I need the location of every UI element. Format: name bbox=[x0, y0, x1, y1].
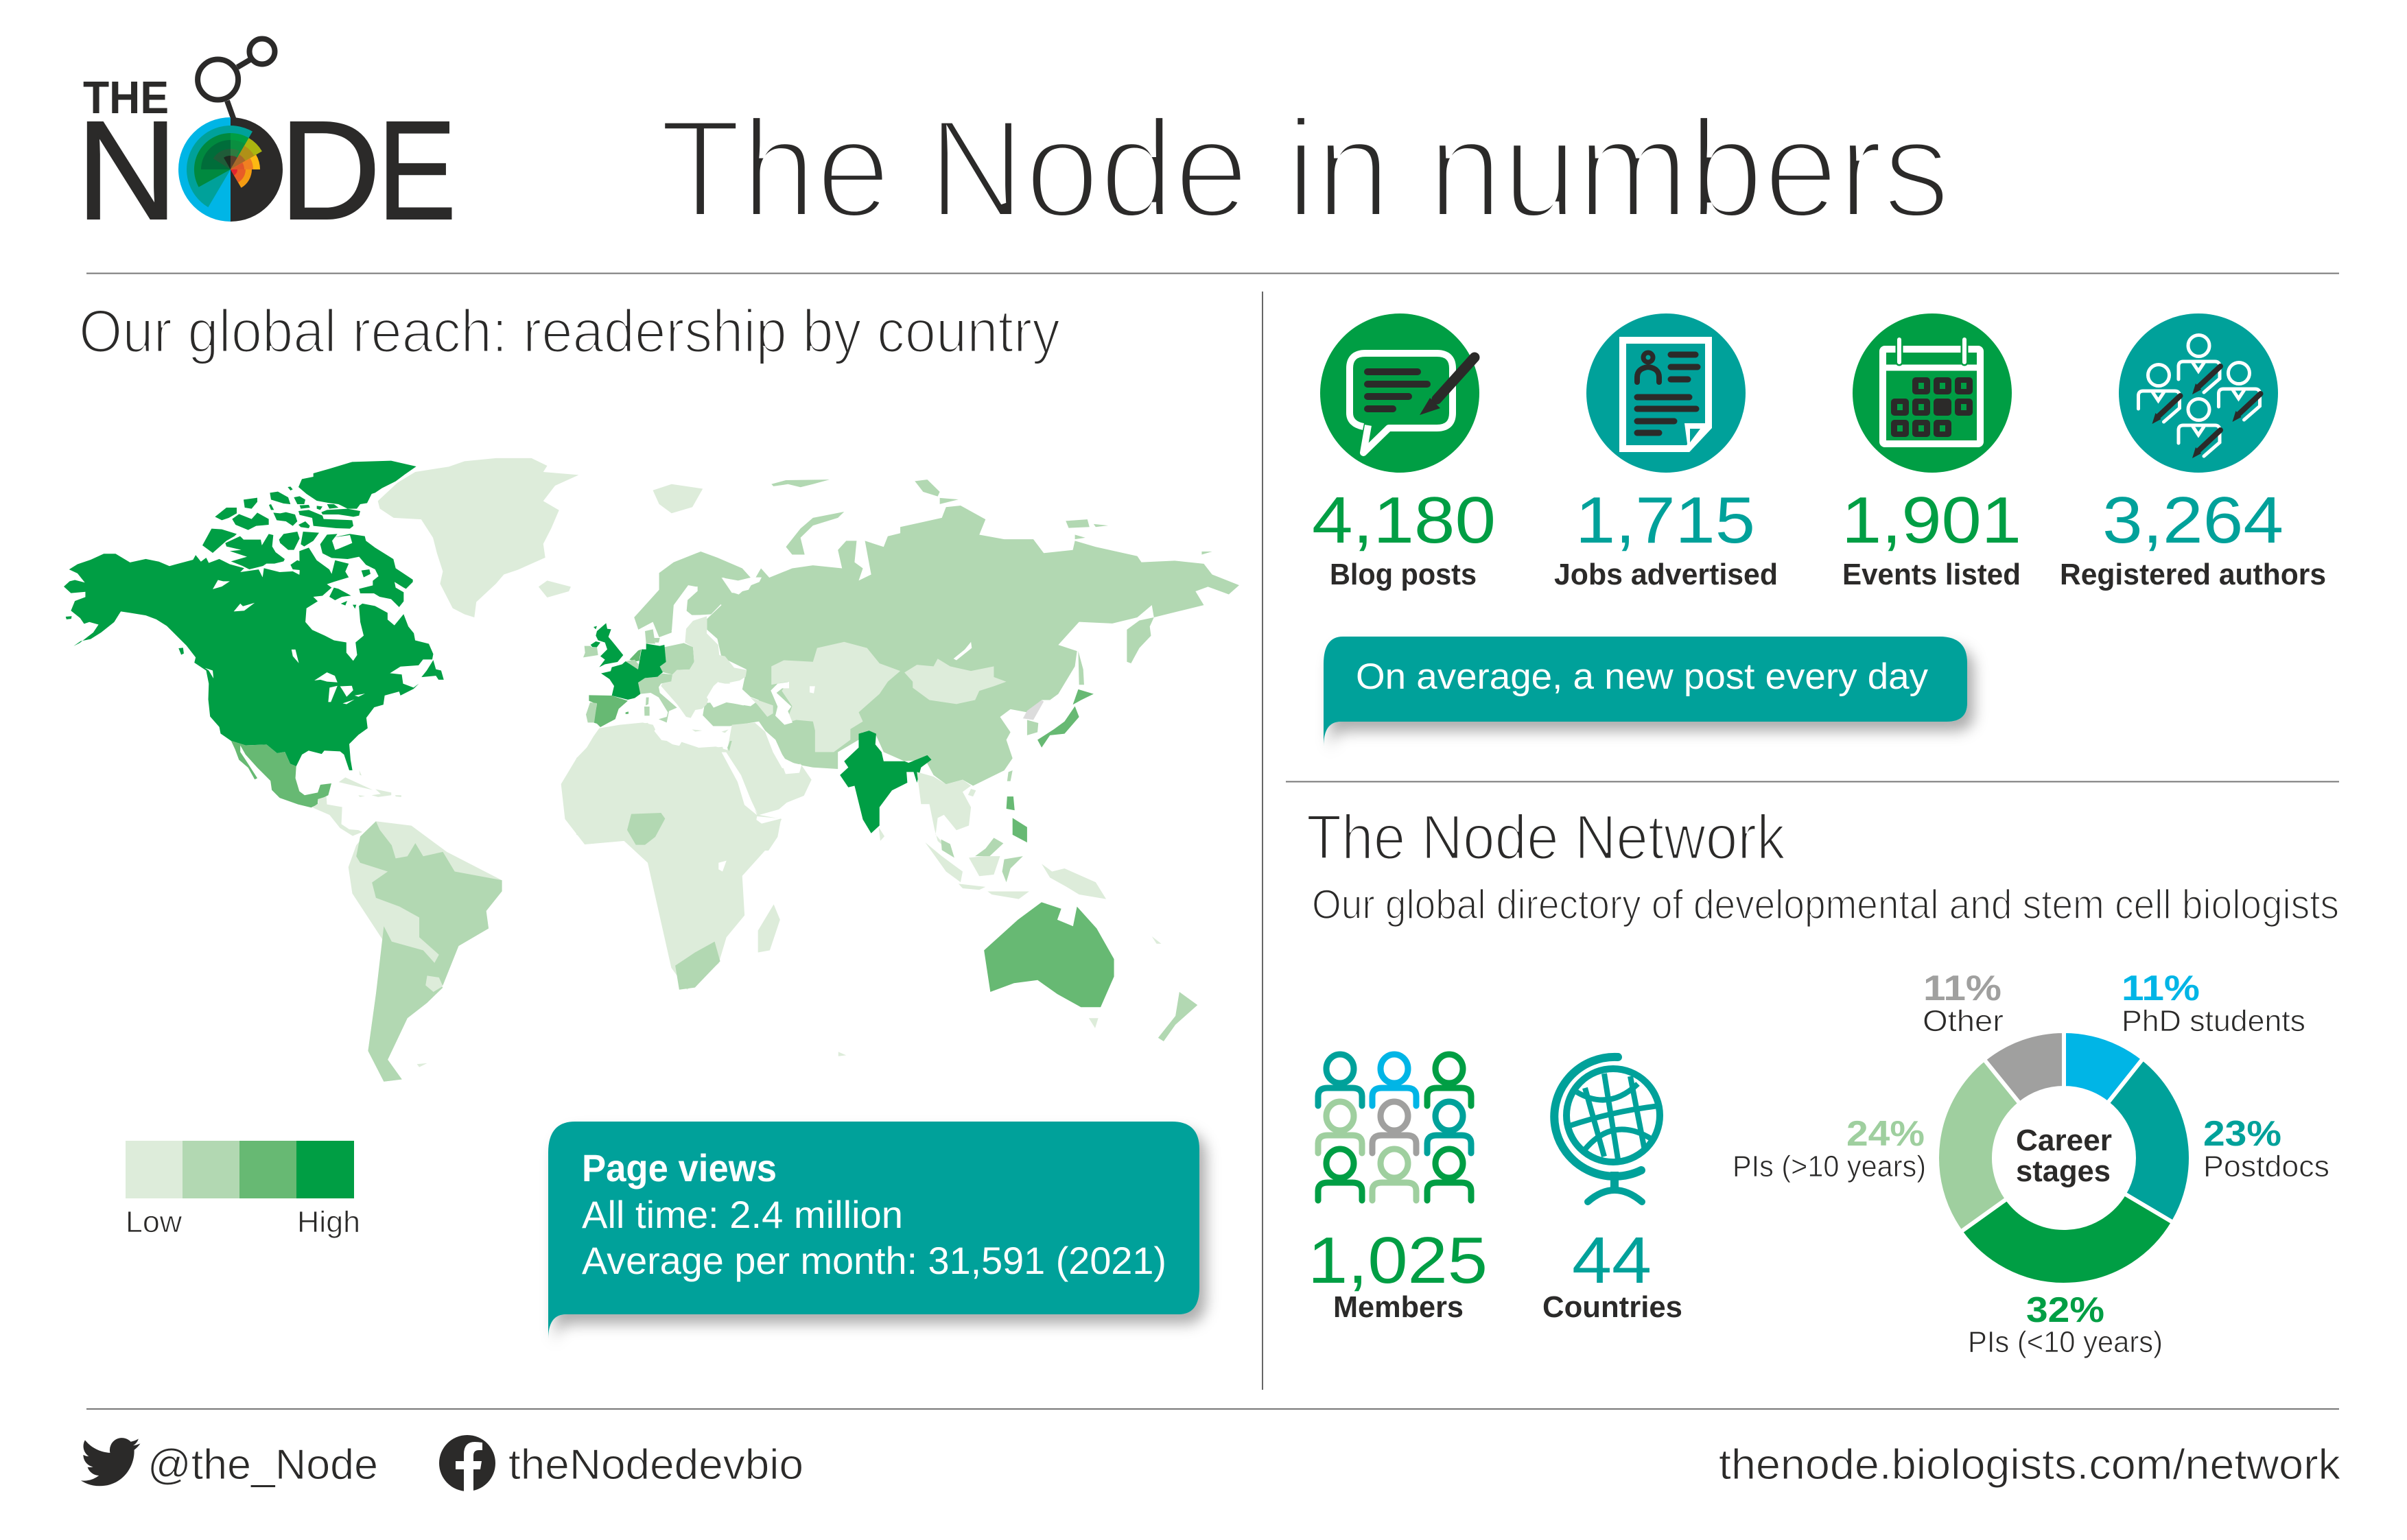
segment: PIs under 10 years bbox=[1961, 1194, 2173, 1285]
label: Other: Other bbox=[1923, 1004, 2004, 1038]
segment: Other bbox=[1984, 1031, 2064, 1104]
label: Events listed bbox=[1842, 558, 2021, 591]
number: 3,264 bbox=[2102, 484, 2283, 557]
label: Other: 11% bbox=[1923, 969, 2001, 1008]
callout: page views: All time: 2.4 million bbox=[582, 1193, 903, 1236]
label: PhD students bbox=[2122, 969, 2305, 1038]
legend bbox=[126, 1141, 360, 1239]
label: PhD students: 11% bbox=[2122, 969, 2200, 1008]
label: Postdocs bbox=[2203, 1114, 2329, 1183]
logo: The Node: N bbox=[76, 92, 178, 249]
label: Countries bbox=[1542, 1290, 1682, 1324]
center label bbox=[2016, 1124, 2112, 1188]
icon: authors with pens bbox=[2119, 313, 2278, 473]
map: southern Africa, South America, Australia bbox=[349, 723, 1197, 1082]
legend: Low bbox=[126, 1205, 182, 1239]
label: PIs over 10 years: 24% bbox=[1846, 1114, 1925, 1154]
donut chart: career stages bbox=[1733, 969, 2329, 1359]
label: PIs over 10 years bbox=[1733, 1114, 1926, 1183]
center label: stages bbox=[2016, 1154, 2111, 1188]
map: Greenland and Iceland bbox=[378, 458, 578, 617]
world map bbox=[64, 458, 1239, 1082]
segment: PIs over 10 years bbox=[1937, 1059, 2020, 1232]
label: PIs under 10 years: 32% bbox=[2026, 1290, 2104, 1330]
legend: High bbox=[297, 1205, 360, 1239]
title: The Node in numbers bbox=[659, 91, 1950, 247]
stat: blog posts bbox=[1312, 313, 1496, 591]
number: 1,025 bbox=[1308, 1224, 1488, 1297]
label: Jobs advertised bbox=[1554, 558, 1778, 591]
label: Other bbox=[1923, 969, 2004, 1038]
logo: The Node bbox=[76, 38, 456, 249]
label: Postdocs: 23% bbox=[2203, 1114, 2281, 1154]
number: 1,901 bbox=[1842, 484, 2021, 557]
callout: page views bbox=[548, 1122, 1199, 1339]
label: PIs under 10 years: PIs (<10 years) bbox=[1968, 1325, 2163, 1359]
label: PIs over 10 years: PIs (>10 years) bbox=[1733, 1150, 1926, 1183]
label: Members bbox=[1333, 1290, 1464, 1324]
map: North and Central America bbox=[64, 547, 444, 836]
icon: globe bbox=[1554, 1057, 1660, 1202]
label: PIs under 10 years bbox=[1968, 1290, 2163, 1359]
map: Canadian Arctic islands bbox=[202, 461, 416, 608]
callout: new post every day bbox=[1324, 637, 1967, 746]
callout: new post every day: On average, a new post every day bbox=[1356, 656, 1929, 697]
stat: events listed bbox=[1842, 313, 2021, 591]
logo: The Node: D bbox=[279, 92, 381, 249]
subheading: directory: Our global directory of developmental and stem cell biologists bbox=[1312, 881, 2339, 927]
handle: @the_Node bbox=[148, 1441, 378, 1489]
callout: page views: Page views bbox=[582, 1146, 777, 1189]
label: Postdocs: Postdocs bbox=[2203, 1150, 2329, 1183]
segment: PhD students bbox=[2064, 1031, 2143, 1103]
callout: page views: Average per month: 31,591 (2021) bbox=[582, 1239, 1166, 1282]
map: Europe, Middle East, North Africa bbox=[576, 578, 812, 851]
number: 4,180 bbox=[1312, 484, 1496, 557]
stat: countries bbox=[1542, 1057, 1682, 1324]
footer: facebook bbox=[439, 1435, 803, 1491]
label: Blog posts bbox=[1330, 558, 1477, 591]
map: Asia and Russia bbox=[634, 479, 1239, 899]
footer: twitter bbox=[81, 1438, 378, 1489]
icon: calendar bbox=[1853, 313, 2012, 473]
footer: website: thenode.biologists.com/network bbox=[1719, 1441, 2341, 1489]
number: 1,715 bbox=[1575, 484, 1755, 557]
handle: theNodedevbio bbox=[508, 1441, 803, 1489]
heading: The Node Network: The Node Network bbox=[1306, 803, 1786, 873]
icon: people grid bbox=[1318, 1054, 1471, 1200]
icon: CV document bbox=[1586, 313, 1746, 473]
number: 44 bbox=[1572, 1224, 1652, 1297]
center label: Career bbox=[2016, 1124, 2112, 1157]
segment: Postdocs bbox=[2108, 1058, 2191, 1222]
stat: members bbox=[1308, 1054, 1488, 1324]
stat: registered authors bbox=[2060, 313, 2326, 591]
label: PhD students: PhD students bbox=[2122, 1004, 2305, 1038]
icon: speech bubble with pen bbox=[1320, 313, 1479, 473]
logo: The Node: THE bbox=[83, 72, 169, 123]
icon: facebook bbox=[439, 1435, 495, 1491]
heading: global reach: Our global reach: readership by country bbox=[79, 297, 1060, 365]
logo: The Node: E bbox=[377, 92, 456, 249]
icon: twitter bird bbox=[81, 1438, 140, 1486]
label: Registered authors bbox=[2060, 558, 2326, 591]
stat: jobs advertised bbox=[1554, 313, 1778, 591]
